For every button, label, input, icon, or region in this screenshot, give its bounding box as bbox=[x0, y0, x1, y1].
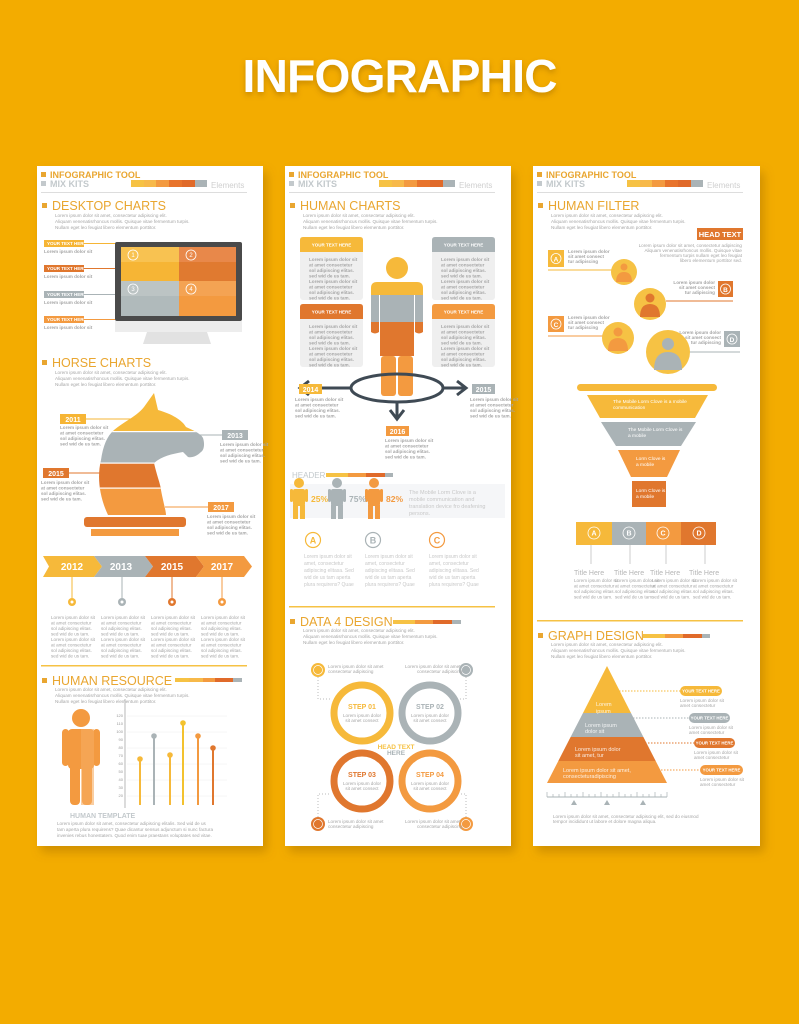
callouts: pyramid: amet consectetur bbox=[689, 730, 725, 735]
labels: horse years: 2017 bbox=[213, 505, 229, 512]
filter letter boxes: Lorem ipsum dolor bbox=[568, 249, 610, 254]
heading: data 4 design: DATA 4 DESIGN bbox=[300, 615, 393, 629]
funnel: The Mobile Lorm Clove is a mobile bbox=[613, 399, 687, 405]
chart: pyramid: consecteturadipiscing bbox=[563, 774, 616, 780]
panel: middle: amet, consectetur bbox=[429, 561, 469, 567]
panel: middle bbox=[285, 166, 519, 846]
text: human template: tam aperta plura requirens? Quae dicantur sensus adjunctum si nunc factura bbox=[57, 827, 213, 832]
icons: corner circles: Lorem ipsum dolor sit amet bbox=[328, 664, 384, 669]
chart: desktop monitor: 1 bbox=[131, 253, 135, 259]
chart: four step rings: sit amet consect bbox=[345, 786, 379, 791]
filter letter boxes: tur adipiscing bbox=[691, 340, 721, 345]
labels: desktop bbox=[44, 240, 115, 330]
text boxes: human charts bbox=[300, 237, 495, 368]
heading: data 4 design bbox=[290, 615, 461, 629]
funnel: Lorm Clove is bbox=[636, 488, 666, 494]
labels: years: 2015 bbox=[476, 387, 491, 394]
icons: people circles bbox=[602, 259, 690, 374]
panel: middle: wid de us tam aperta bbox=[304, 575, 351, 581]
callouts: pyramid: YOUR TEXT HERE bbox=[696, 740, 733, 746]
ruler: tempor incididunt ut labore et dolore magna aliqua. bbox=[553, 819, 656, 824]
ABCD bar: Title Here bbox=[689, 570, 719, 577]
ABCD bar: Title Here bbox=[650, 570, 680, 577]
head text label: Aliquam venenatisrhoncus mollis. Quisque vitae bbox=[644, 248, 742, 253]
timeline pins bbox=[51, 577, 246, 658]
head text label: Lorem ipsum dolor sit amet, consectetur adipiscing bbox=[639, 243, 742, 248]
labels: desktop: YOUR TEXT HERE bbox=[47, 241, 87, 246]
filter letter boxes: tur adipiscing bbox=[568, 325, 598, 330]
panel: middle: Lorem ipsum dolor sit bbox=[429, 554, 477, 560]
stats band: percentages: 25% bbox=[311, 494, 328, 504]
labels: horse years bbox=[41, 414, 269, 536]
chart: four step rings: Lorem ipsum dolor bbox=[343, 781, 381, 786]
funnel: a mobile bbox=[636, 494, 654, 500]
chart: lollipop bars: 80 bbox=[119, 745, 124, 750]
ABCD bar bbox=[574, 522, 738, 600]
chart: lollipop bars: 60 bbox=[119, 761, 124, 766]
panel: middle: adipiscing elitasa. Sed bbox=[429, 568, 479, 574]
panel: middle: adipiscing elitasa. Sed bbox=[304, 568, 354, 574]
chart: lollipop bars: 100 bbox=[116, 729, 124, 734]
ABCD bar: D bbox=[696, 530, 702, 538]
filter letter boxes: Lorem ipsum dolor bbox=[673, 280, 715, 285]
chart: pyramid: ipsum bbox=[596, 709, 611, 715]
callouts: pyramid: amet consectetur bbox=[694, 755, 730, 760]
chart: four step rings: HEAD TEXT bbox=[378, 744, 414, 751]
head text label: HEAD TEXT bbox=[699, 230, 742, 239]
chart: lollipop bars: 30 bbox=[119, 785, 124, 790]
chart: lollipop bars: 50 bbox=[119, 769, 124, 774]
icons: corner circles: consectetur adipiscing bbox=[328, 669, 374, 674]
timeline arrows: 2017 bbox=[211, 562, 234, 573]
filter letter boxes: Lorem ipsum dolor bbox=[679, 330, 721, 335]
stats band: percentages bbox=[290, 478, 505, 519]
funnel: a mobile bbox=[636, 462, 654, 468]
filter letter boxes: sit amet consect bbox=[679, 285, 715, 290]
icons: corner circles: Lorem ipsum dolor sit amet bbox=[328, 819, 384, 824]
icons: corner circles: Lorem ipsum dolor sit amet bbox=[405, 819, 461, 824]
chart: four step rings: Lorem ipsum dolor bbox=[343, 713, 381, 718]
callouts: pyramid: Lorem ipsum dolor sit bbox=[694, 750, 739, 755]
panel: middle: Lorem ipsum dolor sit bbox=[304, 554, 352, 560]
icons: corner circles: consectetur adipiscing bbox=[417, 669, 463, 674]
filter letter boxes: sit amet consect bbox=[568, 254, 604, 259]
chart: four step rings: HERE bbox=[387, 750, 406, 757]
chart: pyramid: dolor sit bbox=[585, 729, 605, 735]
panel: middle: amet, consectetur bbox=[365, 561, 405, 567]
funnel bbox=[577, 384, 717, 507]
filter letter boxes: tur adipiscing bbox=[568, 259, 598, 264]
ABCD bar: Title Here bbox=[614, 570, 644, 577]
chart: lollipop bars: 110 bbox=[117, 721, 124, 726]
panel: middle: adipiscing elitasa. Sed bbox=[365, 568, 415, 574]
panel: middle: wid de us tam aperta bbox=[429, 575, 476, 581]
chart: lollipop bars: 90 bbox=[119, 737, 124, 742]
labels: desktop: YOUR TEXT HERE bbox=[47, 292, 87, 297]
chart: four step rings: sit amet consect bbox=[345, 718, 379, 723]
stats band: percentages: persons. bbox=[409, 511, 431, 517]
header bar: HEADER bbox=[292, 471, 326, 480]
callouts: pyramid: amet consectetur bbox=[700, 782, 736, 787]
chart: lollipop bars: 70 bbox=[119, 753, 124, 758]
filter letter boxes: B bbox=[723, 287, 728, 294]
panel: middle: amet, consectetur bbox=[304, 561, 344, 567]
text: human template: invenies rebus honestatem. Quod enim tuae praestans voluptates sed vitae. bbox=[57, 833, 212, 838]
ABC options bbox=[306, 532, 444, 548]
chart: lollipop bars: 20 bbox=[119, 793, 124, 798]
timeline arrows: 2013 bbox=[110, 562, 133, 573]
panel: middle: plura requirens? Quae bbox=[365, 582, 415, 588]
funnel: The Mobile Lorm Clove is bbox=[628, 427, 683, 433]
panel: middle: Lorem ipsum dolor sit bbox=[365, 554, 413, 560]
ruler: Lorem ipsum dolor sit amet, consectetur adipiscing elit, sed do eiusmod bbox=[553, 814, 699, 819]
arrows: ellipse with three directions bbox=[300, 374, 466, 419]
labels: desktop: Lorem ipsum dolor sit bbox=[44, 325, 93, 330]
filter letter boxes: D bbox=[730, 337, 735, 344]
panel: right bbox=[533, 166, 760, 846]
chart: desktop monitor bbox=[115, 242, 242, 344]
header bar bbox=[292, 471, 393, 480]
filter letter boxes bbox=[548, 249, 740, 352]
chart: pyramid: Lorem bbox=[596, 702, 612, 708]
ABC options: C bbox=[434, 536, 441, 546]
title: INFOGRAPHIC bbox=[242, 50, 558, 102]
panel: middle: plura requirens? Quae bbox=[429, 582, 479, 588]
text: human template: HUMAN TEMPLATE bbox=[70, 813, 136, 820]
chart: four step rings: sit amet consect bbox=[413, 718, 447, 723]
icons: corner circles: consectetur adipiscing bbox=[417, 824, 463, 829]
chart: desktop monitor: 3 bbox=[131, 287, 135, 293]
stats band: percentages: 82% bbox=[386, 494, 403, 504]
ABC options: B bbox=[370, 536, 377, 546]
timeline arrows bbox=[43, 556, 252, 577]
icons: corner circles: consectetur adipiscing bbox=[328, 824, 374, 829]
text boxes: human charts: YOUR TEXT HERE bbox=[444, 242, 483, 248]
labels: desktop: YOUR TEXT HERE bbox=[47, 317, 87, 322]
text: human template: Lorem ipsum dolor sit amet, consectetur adipiscing elitalis. Sed wid de us bbox=[57, 821, 207, 826]
filter letter boxes: C bbox=[554, 322, 559, 329]
chart: pyramid: Lorem ipsum dolor bbox=[575, 747, 621, 753]
funnel: Lorm Clove is bbox=[636, 456, 666, 462]
stats band: percentages: mobile communication and bbox=[409, 497, 474, 503]
chart: four step rings: sit amet consect bbox=[413, 786, 447, 791]
callouts: pyramid bbox=[619, 686, 745, 787]
head text label: fermentum turpis nullam eget leo feugiat bbox=[660, 253, 743, 258]
panel: left bbox=[37, 166, 269, 846]
chart: desktop monitor: 2 bbox=[189, 253, 193, 259]
chart: four step rings: Lorem ipsum dolor bbox=[411, 781, 449, 786]
chart: four step rings: STEP 02 bbox=[416, 704, 444, 711]
chart: pyramid: Lorem ipsum dolor sit amet, bbox=[563, 768, 631, 774]
chart: pyramid: Lorem ipsum bbox=[585, 723, 617, 729]
panel: middle: plura requirens? Quae bbox=[304, 582, 354, 588]
panel: middle: wid de us tam aperta bbox=[365, 575, 412, 581]
labels: years: 2014 bbox=[303, 387, 318, 394]
filter letter boxes: A bbox=[554, 256, 559, 264]
chart: desktop monitor: 4 bbox=[189, 287, 193, 293]
ABCD bar: C bbox=[660, 530, 666, 538]
chart: four step rings: STEP 01 bbox=[348, 704, 376, 711]
filter letter boxes: Lorem ipsum dolor bbox=[568, 315, 610, 320]
heading: human charts: HUMAN CHARTS bbox=[300, 199, 400, 213]
chart: four step rings: Lorem ipsum dolor bbox=[411, 713, 449, 718]
callouts: pyramid: YOUR TEXT HERE bbox=[703, 768, 740, 772]
labels: years: 2016 bbox=[390, 429, 405, 436]
icons: corner circles bbox=[311, 663, 473, 831]
filter letter boxes: sit amet consect bbox=[568, 320, 604, 325]
ABC options: A bbox=[310, 536, 317, 546]
callouts: pyramid: Lorem ipsum dolor sit bbox=[689, 725, 734, 730]
heading: human filter: HUMAN FILTER bbox=[548, 199, 639, 213]
timeline arrows: 2012 bbox=[61, 562, 84, 573]
labels: horse years: 2013 bbox=[227, 433, 243, 440]
chart: four step rings bbox=[334, 685, 458, 809]
ruler bbox=[547, 792, 699, 824]
text: human template bbox=[57, 813, 213, 838]
chart: lollipop bars: 120 bbox=[116, 713, 124, 718]
heading: desktop charts: DESKTOP CHARTS bbox=[52, 199, 166, 213]
text boxes: human charts: YOUR TEXT HERE bbox=[312, 242, 351, 248]
heading: human resource bbox=[42, 674, 242, 688]
chart: lollipop bars bbox=[116, 699, 227, 808]
labels: desktop: YOUR TEXT HERE bbox=[47, 266, 87, 271]
callouts: pyramid: Lorem ipsum dolor sit bbox=[680, 698, 725, 703]
icon: person bbox=[371, 257, 423, 396]
heading: human resource: HUMAN RESOURCE bbox=[52, 674, 172, 688]
icons: corner circles: Lorem ipsum dolor sit amet bbox=[405, 664, 461, 669]
text boxes: human charts: YOUR TEXT HERE bbox=[444, 310, 483, 314]
heading: graph design bbox=[538, 629, 710, 643]
chart: four step rings: STEP 03 bbox=[348, 772, 376, 779]
labels: horse years: 2011 bbox=[65, 417, 81, 424]
funnel: a mobile bbox=[628, 433, 646, 439]
labels: desktop: Lorem ipsum dolor sit bbox=[44, 274, 93, 279]
stats band: percentages: 75% bbox=[349, 494, 366, 504]
filter letter boxes: tur adipiscing bbox=[685, 290, 715, 295]
stats band: percentages: The Mobile Lorm Clove is a bbox=[409, 490, 477, 496]
callouts: pyramid: Lorem ipsum dolor sit bbox=[700, 777, 745, 782]
heading: graph design: GRAPH DESIGN bbox=[548, 629, 644, 643]
head text label bbox=[639, 228, 743, 263]
text boxes: human charts: YOUR TEXT HERE bbox=[312, 310, 351, 314]
chart: pyramid bbox=[547, 666, 667, 783]
labels: desktop: Lorem ipsum dolor sit bbox=[44, 249, 93, 254]
funnel: communication bbox=[613, 405, 646, 411]
chart: four step rings: STEP 04 bbox=[416, 772, 444, 779]
labels: desktop: Lorem ipsum dolor sit bbox=[44, 300, 93, 305]
chart: horse bbox=[84, 393, 204, 536]
chart: lollipop bars: 40 bbox=[119, 777, 124, 782]
ABCD bar: Title Here bbox=[574, 570, 604, 577]
ABCD bar: A bbox=[591, 530, 597, 538]
head text label: libero elementum porttitor sed. bbox=[680, 258, 742, 263]
callouts: pyramid: YOUR TEXT HERE bbox=[682, 688, 720, 694]
filter letter boxes: sit amet consect bbox=[685, 335, 721, 340]
labels: horse years: 2015 bbox=[48, 471, 64, 478]
icon: human figure bbox=[62, 709, 100, 805]
stats band: percentages: translation device fro deafening bbox=[409, 504, 485, 510]
ABCD bar: B bbox=[626, 530, 632, 538]
chart: pyramid: sit amet, tur bbox=[575, 753, 604, 759]
callouts: pyramid: amet consectetur bbox=[680, 703, 716, 708]
labels: years bbox=[295, 384, 519, 460]
timeline arrows: 2015 bbox=[161, 562, 184, 573]
callouts: pyramid: YOUR TEXT HERE bbox=[691, 716, 728, 720]
heading: horse charts: HORSE CHARTS bbox=[52, 356, 151, 370]
